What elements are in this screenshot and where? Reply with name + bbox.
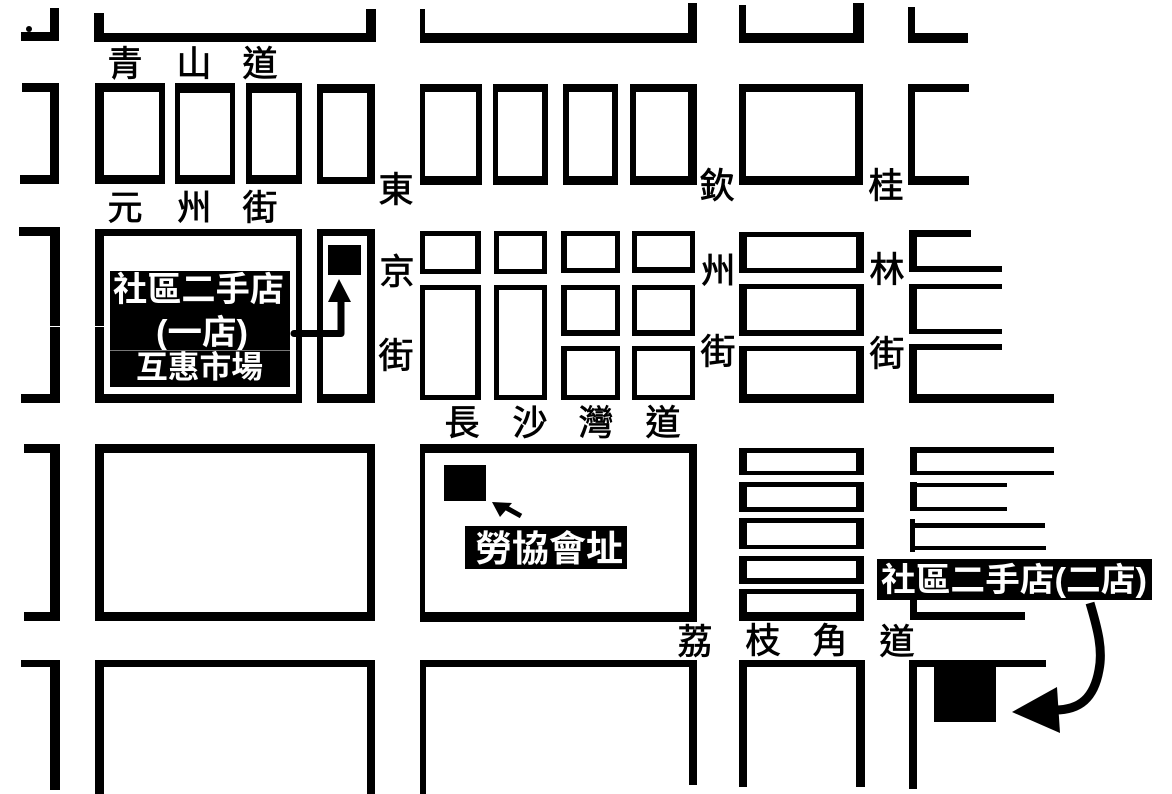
- callout: 社區二手店(二店): 社區二手店(二店): [881, 561, 1147, 598]
- road name: 荔枝角道: [677, 622, 915, 662]
- callout: 社區二手店(一店) 互惠市場: [110, 271, 290, 387]
- road name: 桂林街: 街: [869, 335, 905, 374]
- road name: 元州街: 元: [107, 189, 143, 228]
- row 5 open blocks: [21, 660, 1046, 794]
- row 4 blocks: [24, 444, 1054, 622]
- location marker: shop 1: [328, 245, 361, 275]
- thin scan lines: [50, 326, 104, 327]
- callout: 社區二手店(一店) 互惠市場: 社區二手店: [113, 271, 284, 309]
- row 2 blocks: [20, 83, 969, 185]
- road name: 荔枝角道: 道: [879, 623, 915, 662]
- arrow: association office: [492, 502, 521, 517]
- road name: 桂林街: 桂: [868, 167, 904, 206]
- road name: 長沙灣道: 沙: [512, 404, 548, 443]
- road name: 元州街: 州: [176, 189, 212, 228]
- road name: 桂林街: [868, 167, 905, 374]
- road name: 欽州街: 州: [700, 252, 736, 291]
- dot: [26, 26, 32, 32]
- road name: 東京街: 東: [378, 171, 414, 210]
- callout: 社區二手店(一店) 互惠市場: (一店): [156, 314, 248, 352]
- road name: 荔枝角道: 枝: [745, 622, 781, 661]
- road name: 東京街: 街: [378, 337, 414, 376]
- row 3 blocks: [19, 227, 1054, 403]
- road name: 欽州街: [699, 167, 736, 372]
- location marker: association office: [444, 465, 486, 501]
- arrow: shop 2 label to marker: [1012, 603, 1100, 733]
- road name: 欽州街: 街: [700, 333, 736, 372]
- road name: 長沙灣道: 長: [444, 404, 480, 443]
- road name: 青山道: 山: [176, 45, 212, 84]
- road name: 欽州街: 欽: [699, 167, 735, 206]
- road name: 東京街: [378, 171, 415, 376]
- road name: 長沙灣道: [444, 404, 681, 443]
- arrow: shop 1 label to marker: [294, 279, 351, 334]
- callout: 勞協會址: 勞協會址: [475, 528, 623, 569]
- callout: 社區二手店(一店) 互惠市場: 互惠市場: [136, 350, 263, 385]
- row 1 open blocks: [21, 3, 968, 43]
- road name: 元州街: 街: [242, 189, 278, 228]
- location marker: shop 2: [934, 667, 996, 722]
- road name: 長沙灣道: 灣: [578, 404, 614, 443]
- road name: 荔枝角道: 角: [812, 622, 848, 661]
- road name: 荔枝角道: 荔: [677, 623, 713, 662]
- road name: 青山道: 道: [242, 45, 278, 84]
- road name: 長沙灣道: 道: [645, 404, 681, 443]
- road name: 桂林街: 林: [869, 251, 905, 290]
- road name: 青山道: 青: [107, 45, 143, 84]
- road name: 青山道: [107, 45, 278, 84]
- road name: 元州街: [107, 189, 278, 228]
- road name: 東京街: 京: [379, 253, 415, 292]
